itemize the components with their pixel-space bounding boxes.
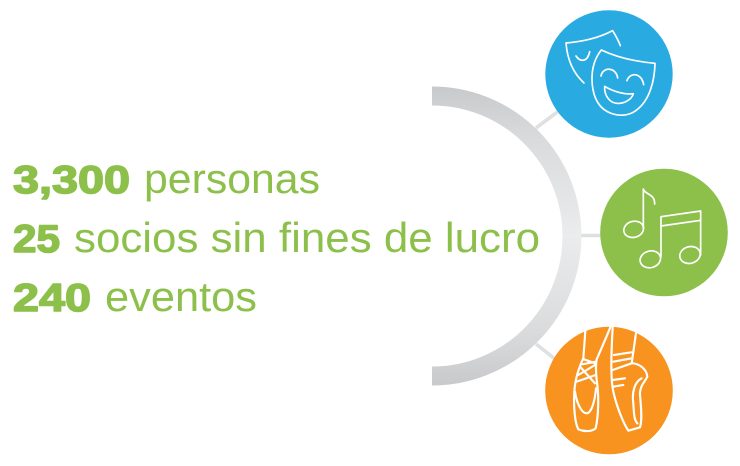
icon: ballet shoes (545, 327, 673, 454)
stat: eventos: eventos (105, 273, 257, 320)
stat: eventos (13, 273, 257, 320)
stat: personas: personas (144, 155, 320, 202)
stat: eventos: 240 (13, 277, 91, 320)
stat: socios sin fines de lucro: 25 (13, 218, 60, 261)
connector: music (581, 234, 602, 237)
connector: ballet (536, 344, 560, 363)
icon: music notes (600, 169, 728, 296)
semicircular arc (432, 96, 572, 376)
stat: personas (13, 155, 320, 202)
icon: theatre masks (545, 10, 673, 138)
stat: socios sin fines de lucro: socios sin fines de lucro (74, 214, 540, 261)
connector: masks (536, 110, 560, 128)
stat: personas: 3,300 (13, 159, 130, 202)
